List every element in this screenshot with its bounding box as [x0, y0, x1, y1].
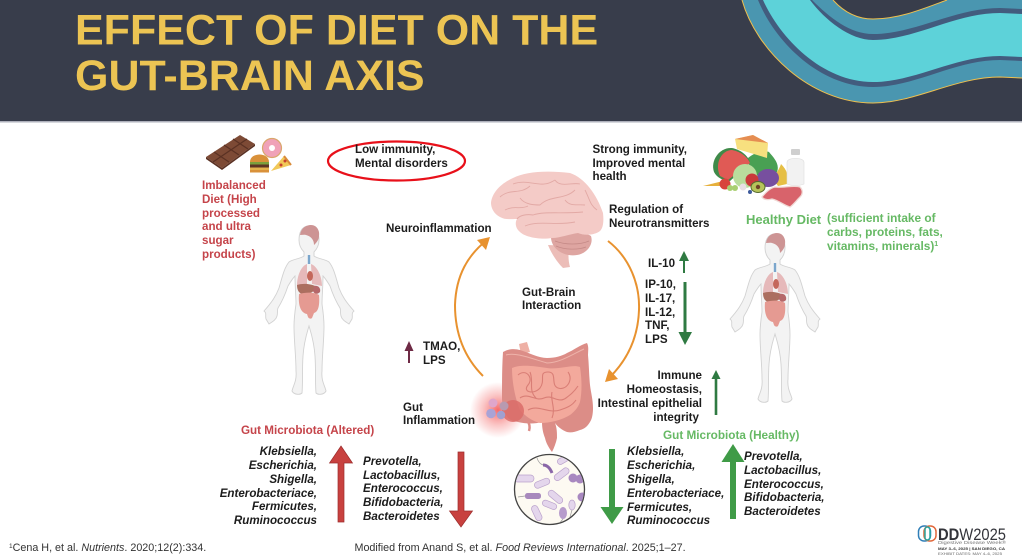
- list: healthy decreased bacteria: Klebsiella,: [627, 445, 684, 458]
- label: gut inflammation: Gut: [403, 401, 423, 414]
- label: strong immunity: [592, 143, 687, 183]
- title: EFFECT OF DIET ON THE: [75, 6, 598, 54]
- arrow: healthy up: [722, 444, 744, 519]
- list: healthy decreased bacteria: Fermicutes,: [627, 501, 692, 514]
- decorative wave: [742, 0, 1022, 103]
- label: gut inflammation: Inflammation: [403, 414, 475, 427]
- footnote: source: Modified from Anand S, et al. Food Reviews International. 2025;1–27.: [354, 542, 686, 554]
- label: gut microbiota healthy: Gut Microbiota (Healthy): [663, 429, 800, 442]
- arrow: altered up: [330, 446, 352, 522]
- arrow: altered down: [450, 452, 472, 527]
- list: healthy decreased bacteria: Escherichia,: [627, 459, 695, 472]
- icon: chocolate bar: [206, 135, 255, 170]
- arrow: immune up: [712, 370, 720, 415]
- callout: low immunity: [328, 142, 465, 180]
- arrow: cytokines down: [678, 282, 692, 345]
- label: strong immunity: Improved mental: [592, 157, 685, 170]
- title line 2: GUT-BRAIN AXIS: [75, 52, 425, 100]
- footnote: citation: Cena H, et al.: [13, 542, 81, 554]
- label: immune homeostasis: Immune: [658, 369, 703, 382]
- arrow: TMAO up: [404, 341, 414, 363]
- inflammation glow: [470, 382, 526, 438]
- icon: tomato and cucumber: [720, 174, 758, 194]
- arrow: IL-10 up: [679, 251, 689, 273]
- label: immune homeostasis: integrity: [653, 411, 700, 424]
- list: altered decreased bacteria: Bifidobacteria,: [363, 496, 444, 509]
- label: regulation of neurotransmitters: Regulation of: [609, 203, 683, 216]
- list: altered increased bacteria: Escherichia,: [249, 459, 317, 472]
- label: cytokines: IP-10,: [645, 278, 676, 291]
- list: altered decreased bacteria: Lactobacillus,: [363, 469, 440, 482]
- list: altered decreased bacteria: Prevotella,: [363, 455, 422, 468]
- icon: banana: [772, 164, 788, 186]
- label: strong immunity: Strong immunity,: [592, 143, 687, 156]
- list: healthy decreased bacteria: Shigella,: [627, 473, 675, 486]
- icon: steak: [762, 186, 802, 207]
- icon: grapes: [757, 169, 779, 187]
- label: imbalanced diet: Diet (High: [202, 193, 257, 206]
- label: imbalanced diet: Imbalanced: [202, 179, 266, 192]
- label: TMAO, LPS: LPS: [423, 354, 446, 367]
- callout: low immunity: Low immunity,: [355, 143, 435, 156]
- callout: low immunity: Mental disorders: [355, 157, 448, 170]
- list: healthy increased bacteria: Bifidobacteria,: [744, 491, 825, 504]
- label: imbalanced diet: sugar: [202, 234, 234, 247]
- list: altered decreased bacteria: Enterococcus,: [363, 482, 443, 495]
- label: cytokines: IL-12,: [645, 306, 675, 319]
- list: altered increased bacteria: Enterobacteriace,: [220, 487, 317, 500]
- icon: cheese: [735, 135, 768, 158]
- icon: burger: [250, 154, 269, 172]
- label: healthy diet detail: 1: [934, 241, 938, 248]
- list: altered increased bacteria: Shigella,: [269, 473, 317, 486]
- label: immune homeostasis: Homeostasis,: [627, 383, 702, 396]
- logo: DDW 2025: Digestive Disease Week®: [938, 539, 1007, 545]
- logo: DDW 2025: EXHIBIT DATES: MAY 4–6, 2025: [938, 552, 1002, 556]
- icon: microbiome petri circle: [514, 454, 586, 525]
- arrow: gut to brain: [455, 237, 490, 376]
- footnote: citation: 1: [9, 543, 13, 550]
- label: imbalanced diet: and ultra: [202, 220, 252, 233]
- label: regulation of neurotransmitters: Neurotransmitters: [609, 217, 710, 230]
- label: cytokines: LPS: [645, 333, 668, 346]
- label: healthy diet detail: vitamins, minerals): [827, 239, 934, 253]
- list: healthy increased bacteria: Bacteroidetes: [744, 505, 821, 518]
- list: healthy decreased bacteria: Enterobacteriace,: [627, 487, 724, 500]
- list: altered increased bacteria: Klebsiella,: [260, 445, 317, 458]
- label: healthy diet detail: (sufficient intake of: [827, 211, 936, 225]
- icon: carrot: [703, 181, 726, 186]
- label: strong immunity: health: [592, 170, 627, 183]
- label: IL-10: IL-10: [648, 257, 675, 270]
- list: healthy increased bacteria: Enterococcus,: [744, 478, 824, 491]
- icon: brain: [491, 172, 603, 268]
- icon: cabbage: [733, 164, 757, 188]
- list: altered increased bacteria: [220, 445, 318, 527]
- footnote: citation: Nutrients. 2020;12(2):334.: [81, 542, 206, 554]
- label: cytokines: [645, 278, 676, 346]
- icon: healthy food: [703, 135, 804, 207]
- logo: DDW 2025: [918, 526, 1007, 556]
- logo rings: [918, 526, 936, 541]
- label: gut-brain interaction: Interaction: [522, 299, 581, 312]
- label: cytokines: TNF,: [645, 319, 669, 332]
- icon: milk bottle: [787, 149, 804, 186]
- list: altered increased bacteria: Fermicutes,: [252, 500, 317, 513]
- label: immune homeostasis: Intestinal epithelial: [598, 397, 702, 410]
- arrow: brain to gut: [605, 241, 639, 382]
- logo: DDW 2025: DDW2025: [938, 526, 1006, 544]
- icon: watermelon: [713, 148, 750, 181]
- label: healthy diet detail: [827, 211, 943, 253]
- label: cytokines: IL-17,: [645, 292, 675, 305]
- icon: intestines: [470, 342, 593, 452]
- label: healthy diet: Healthy Diet: [746, 212, 822, 227]
- label: gut microbiota altered: Gut Microbiota (Altered): [241, 424, 374, 437]
- list: altered increased bacteria: Ruminococcus: [234, 514, 318, 527]
- label: imbalanced diet: [202, 179, 266, 261]
- logo: DDW 2025: MAY 3–6, 2025 | SAN DIEGO, CA: [938, 547, 1005, 551]
- list: healthy decreased bacteria: Ruminococcus: [627, 514, 711, 527]
- icon: pizza: [271, 156, 291, 171]
- list: healthy increased bacteria: Lactobacillus,: [744, 464, 821, 477]
- label: imbalanced diet: processed: [202, 207, 260, 220]
- icon: lettuce greens: [748, 151, 778, 176]
- icon: unhealthy food: [206, 135, 291, 172]
- icon: avocado: [751, 182, 765, 192]
- icon: donut: [262, 138, 282, 158]
- list: altered decreased bacteria: Bacteroidetes: [363, 510, 440, 523]
- immune cells: [486, 398, 508, 419]
- list: healthy decreased bacteria: [627, 445, 724, 527]
- label: gut inflammation: [403, 401, 475, 427]
- label: gut-brain interaction: Gut-Brain: [522, 286, 575, 299]
- label: regulation of neurotransmitters: [609, 203, 710, 230]
- label: gut-brain interaction: [522, 286, 581, 312]
- label: neuroinflammation: Neuroinflammation: [386, 222, 492, 235]
- label: immune homeostasis: [598, 369, 703, 424]
- label: imbalanced diet: products): [202, 248, 256, 261]
- label: TMAO, LPS: TMAO,: [423, 340, 460, 353]
- label: TMAO, LPS: [423, 340, 460, 367]
- header banner: [0, 0, 1022, 122]
- list: healthy increased bacteria: Prevotella,: [744, 450, 803, 463]
- list: healthy increased bacteria: [744, 450, 825, 518]
- figure: human body, healthy: [730, 233, 820, 402]
- label: healthy diet detail: carbs, proteins, fats,: [827, 225, 943, 239]
- arrow: healthy down: [600, 449, 624, 524]
- list: altered decreased bacteria: [363, 455, 444, 523]
- figure: human body, imbalanced: [264, 225, 354, 394]
